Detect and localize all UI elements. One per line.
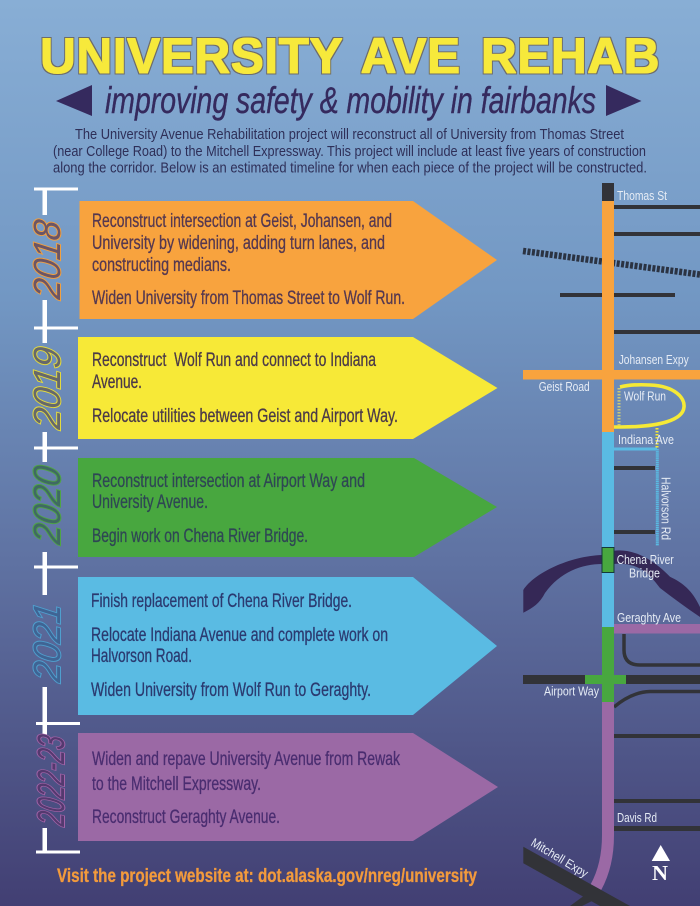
- map labels: [528, 189, 689, 881]
- arrow panel: 2022-23: to the Mitchell Expressway.: [92, 774, 261, 795]
- map labels: Mitchell Expy: [528, 836, 591, 881]
- arrow panel: 2018: University by widening, adding turn lanes, and: [92, 233, 385, 254]
- map labels: Wolf Run: [624, 390, 666, 404]
- icon: north arrow: N: [652, 861, 668, 885]
- intro text: The University Avenue Rehabilitation project will reconstruct all of University from Thomas Street: [75, 126, 625, 143]
- intro text: [53, 126, 647, 176]
- arrow panel: 2019: Avenue.: [92, 372, 142, 393]
- map labels: Davis Rd: [617, 811, 657, 825]
- railroad: [523, 251, 700, 274]
- map labels: Bridge: [629, 567, 660, 581]
- arrow panel: 2022-23: Widen and repave University Avenue from Rewak: [92, 749, 400, 770]
- year label 2019: 2019: [26, 344, 69, 432]
- map labels: Airport Way: [544, 685, 600, 699]
- arrow panel: 2022-23: Reconstruct Geraghty Avenue.: [92, 807, 280, 828]
- year label 2018: 2018: [26, 217, 69, 302]
- title: UNIVERSITY AVE REHAB: [40, 28, 660, 84]
- map labels: Indiana Ave: [618, 433, 674, 447]
- cross streets: [523, 183, 700, 906]
- arrow panel: 2021: Widen University from Wolf Run to Geraghty.: [91, 680, 371, 701]
- corridor map: [523, 183, 700, 906]
- arrow panel: 2020: Reconstruct intersection at Airport Way and: [92, 471, 365, 492]
- bridge marker: [602, 548, 614, 572]
- icon: north arrow: [652, 845, 670, 885]
- arrow panel: 2018: [80, 201, 497, 319]
- year label 2022-23: 2022-23: [30, 732, 73, 829]
- arrow panel: 2020: [78, 458, 497, 557]
- year label 2020: 2020: [26, 463, 69, 547]
- arrow panel: 2019: Relocate utilities between Geist and Airport Way.: [92, 406, 398, 427]
- arrow panel: 2019: Reconstruct Wolf Run and connect to Indiana: [92, 350, 376, 371]
- university avenue segments: [523, 201, 700, 887]
- arrow panel: 2022-23: [78, 733, 498, 841]
- arrow panel: 2021: Finish replacement of Chena River Bridge.: [91, 591, 352, 612]
- footer website link: Visit the project website at: dot.alaska.gov/nreg/university: [57, 866, 477, 887]
- map labels: Geraghty Ave: [617, 611, 681, 625]
- arrow panel: 2021: Relocate Indiana Avenue and complete work on: [91, 625, 388, 646]
- arrow panel: 2018: Reconstruct intersection at Geist, Johansen, and: [92, 211, 392, 232]
- year label 2021: 2021: [26, 600, 69, 685]
- arrow panel: 2020: Begin work on Chena River Bridge.: [92, 526, 308, 547]
- map labels: Chena River: [617, 553, 674, 567]
- river: [523, 550, 700, 617]
- arrow panel: 2018: Widen University from Thomas Street to Wolf Run.: [92, 288, 405, 309]
- indiana and halvorson roads: [614, 449, 657, 546]
- timeline axis: [34, 188, 80, 854]
- curved ramps: [614, 634, 700, 707]
- arrow panel: 2019: [78, 337, 498, 439]
- map labels: Thomas St: [617, 189, 667, 203]
- map labels: Geist Road: [539, 380, 590, 394]
- map labels: Halvorson Rd: [659, 477, 673, 540]
- wolf run loop: [614, 385, 684, 448]
- arrow panel: 2021: Halvorson Road.: [91, 646, 192, 667]
- arrow panel: 2020: University Avenue.: [92, 492, 208, 513]
- arrow panel: 2018: constructing medians.: [92, 255, 231, 276]
- arrow panel: 2021: [78, 577, 497, 715]
